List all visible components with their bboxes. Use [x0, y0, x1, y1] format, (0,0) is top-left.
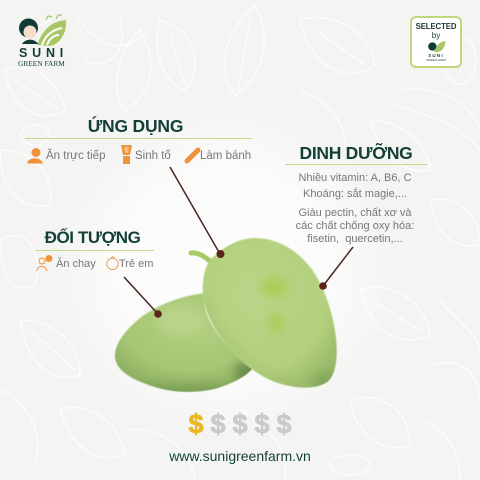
text: Ăn chay: Ăn chay: [56, 258, 96, 270]
logo: Suni Green Farm: GREEN FARM: [18, 59, 65, 68]
icon: person eating: [27, 148, 43, 164]
icon: dollar 3: $: [232, 409, 248, 439]
pointer: audience: [124, 277, 162, 318]
icon: dollar 4: $: [254, 409, 270, 439]
text: Sinh tố: Sinh tố: [135, 150, 171, 162]
heading: Ứng dụng: [25, 114, 252, 139]
logo: Suni Green Farm: SUNI: [19, 46, 68, 60]
icon: farm dome: [37, 15, 66, 46]
central glow: [55, 105, 395, 435]
back mango: [114, 292, 252, 392]
badge: selected by Suni: by: [432, 31, 440, 40]
text: Trẻ em: Trẻ em: [119, 258, 153, 270]
website url: www.sunigreenfarm.vn: [169, 448, 311, 464]
logo: Suni Green Farm: [18, 14, 68, 68]
heading: Đối tượng: [35, 227, 154, 251]
nutrition text: Khoáng: sắt magie,...: [303, 188, 407, 200]
icon: dollar 5: $: [276, 409, 292, 439]
nutrition text: [296, 172, 414, 245]
nutrition text: Giàu pectin, chất xơ và: [298, 207, 412, 219]
heading: Ứng dụng: ỨNG DỤNG: [88, 116, 183, 136]
front mango: [203, 238, 344, 392]
badge: selected by Suni: [410, 16, 462, 68]
pointer: nutrition: [319, 247, 353, 290]
pointer: uses: [170, 167, 224, 258]
mango illustration: [114, 166, 354, 392]
heading: Dinh dưỡng: DINH DƯỠNG: [300, 143, 412, 163]
icon: vegetarian: [36, 255, 52, 272]
heading: Đối tượng: ĐỐI TƯỢNG: [45, 228, 140, 247]
icon: girl: [19, 18, 39, 45]
price rating: [188, 409, 292, 439]
icon: baby: [106, 256, 119, 270]
stem: [191, 253, 212, 263]
text: Làm bánh: Làm bánh: [200, 150, 251, 162]
audience list: [36, 255, 153, 272]
icon: rolling pin: [184, 148, 200, 164]
text: Ăn trực tiếp: Ăn trực tiếp: [46, 150, 105, 162]
icon: dollar 2: $: [210, 409, 226, 439]
uses list: [27, 145, 251, 164]
nutrition text: fisetin, quercetin,...: [307, 233, 403, 245]
badge: selected by Suni: SELECTED: [416, 22, 456, 31]
nutrition text: Nhiều vitamin: A, B6, C: [298, 172, 412, 184]
icon: blender: [121, 145, 132, 164]
nutrition text: các chất chống oxy hóa:: [296, 220, 414, 232]
icon: dollar active: $: [188, 409, 204, 439]
badge: selected by Suni: GREEN FARM: [426, 58, 446, 62]
badge: selected by Suni: SUNI: [428, 53, 444, 58]
